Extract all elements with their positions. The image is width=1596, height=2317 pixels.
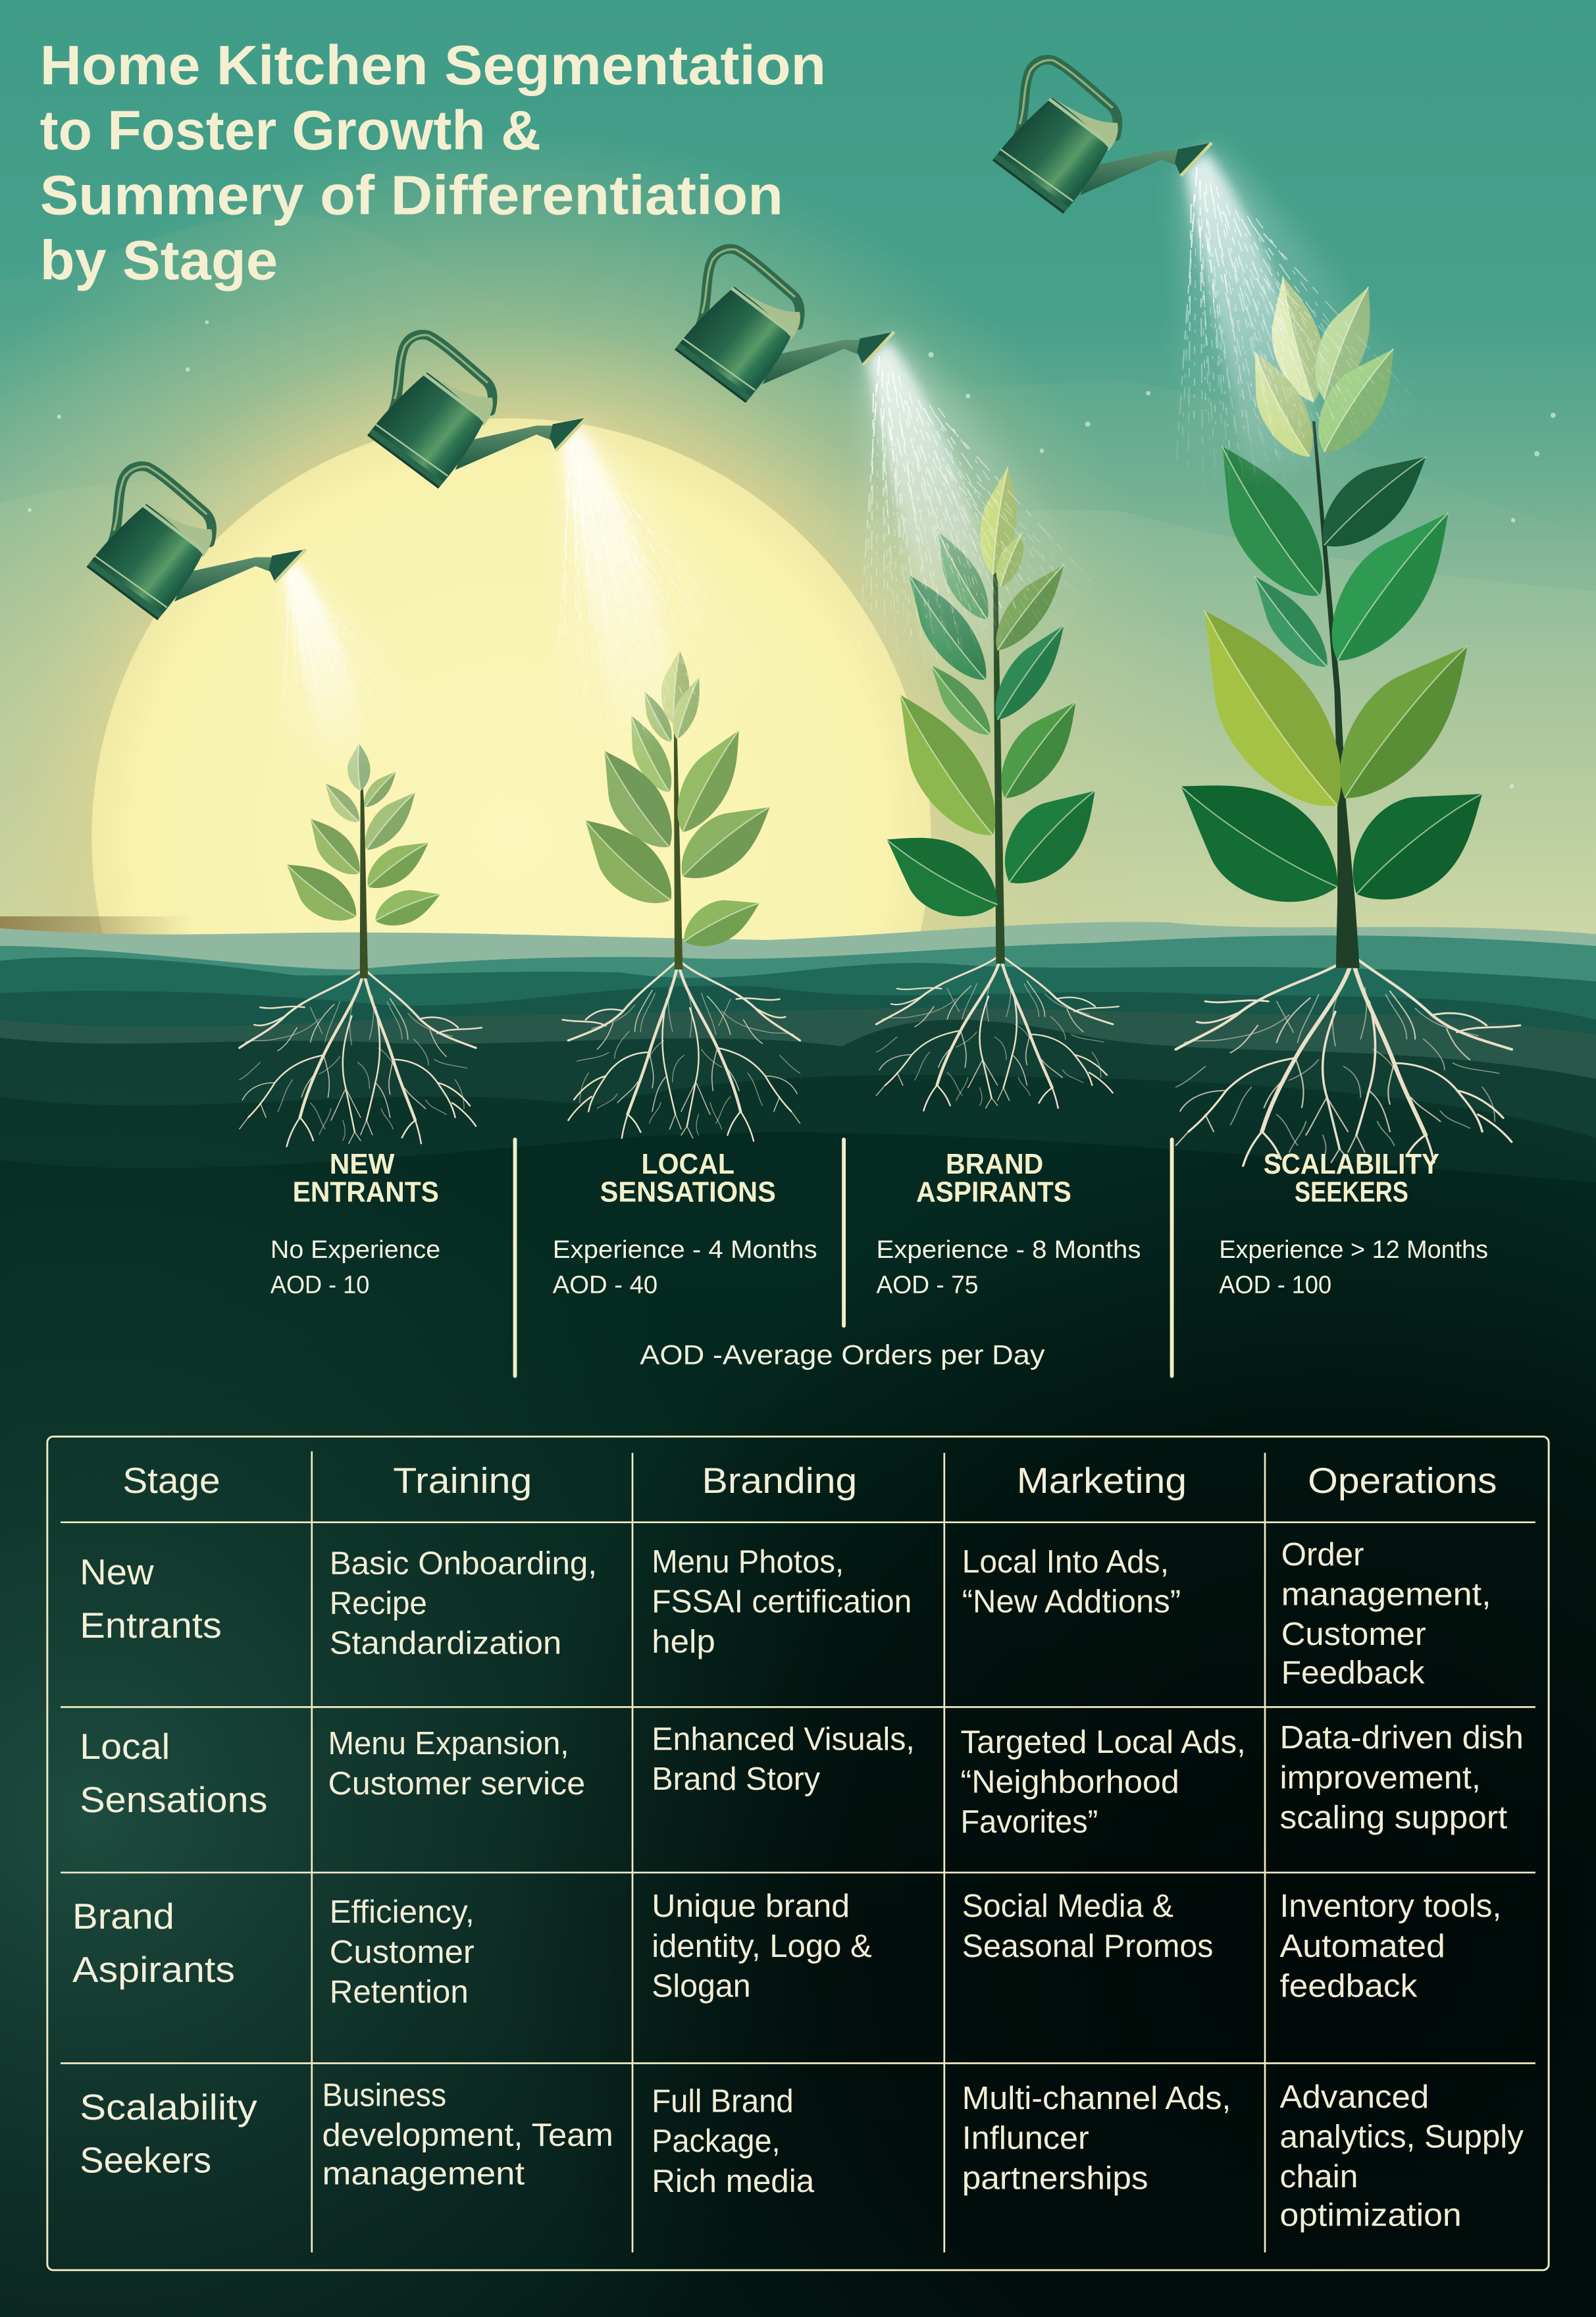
row: brand aspirants: feedback — [1279, 1967, 1418, 2004]
row: brand aspirants: Social Media & — [962, 1888, 1173, 1924]
table header row — [122, 1460, 1497, 1501]
stage: new entrants: NEW — [330, 1148, 395, 1180]
row: scalability seekers: Advanced — [1279, 2079, 1429, 2115]
row: local sensations: Favorites” — [960, 1804, 1098, 1840]
table: differentiation by stage — [47, 1436, 1549, 2270]
stage: brand aspirants: Experience - 8 Months — [877, 1236, 1141, 1264]
watering can 1 with spray — [87, 466, 442, 787]
row: new entrants — [80, 1536, 1491, 1690]
stage: brand aspirants — [877, 1148, 1141, 1299]
stage: local sensations — [553, 1148, 817, 1299]
row: brand aspirants: Inventory tools, — [1279, 1888, 1501, 1924]
row: scalability seekers: partnerships — [962, 2160, 1148, 2196]
stage: scalability seekers — [1219, 1148, 1488, 1299]
stage: scalability seekers: Experience > 12 Months — [1219, 1236, 1488, 1264]
row: new entrants: Basic Onboarding, — [330, 1545, 597, 1581]
row: brand aspirants: Brand — [72, 1896, 174, 1937]
row: local sensations: Targeted Local Ads, — [960, 1724, 1246, 1760]
stage: new entrants: ENTRANTS — [293, 1176, 439, 1208]
plant 3: brand aspirants — [868, 465, 1119, 1110]
row: scalability seekers: Scalability — [80, 2087, 257, 2127]
stage: new entrants: No Experience — [270, 1236, 440, 1264]
row: scalability seekers: Multi-channel Ads, — [962, 2080, 1231, 2116]
table header row: Operations — [1308, 1460, 1497, 1501]
stage: scalability seekers: SCALABILITY — [1264, 1148, 1439, 1180]
row: new entrants: Customer — [1281, 1616, 1426, 1652]
stage: brand aspirants: BRAND — [946, 1148, 1043, 1180]
stage: brand aspirants: ASPIRANTS — [916, 1176, 1071, 1208]
row: new entrants: Feedback — [1281, 1654, 1425, 1690]
row: brand aspirants: Customer — [330, 1934, 475, 1970]
watering can 2 with spray — [368, 334, 790, 789]
row: local sensations: “Neighborhood — [960, 1764, 1179, 1800]
row: scalability seekers: development, Team — [322, 2117, 613, 2153]
row: local sensations: Enhanced Visuals, — [652, 1721, 915, 1757]
table header row: Branding — [702, 1460, 857, 1501]
row: brand aspirants: Retention — [330, 1973, 469, 2010]
row: brand aspirants: Automated — [1279, 1928, 1445, 1964]
row: brand aspirants: Slogan — [652, 1967, 751, 2004]
row: new entrants: “New Addtions” — [962, 1584, 1181, 1620]
row: brand aspirants: Seasonal Promos — [962, 1928, 1213, 1964]
row: local sensations: scaling support — [1279, 1799, 1508, 1835]
row: brand aspirants: Aspirants — [72, 1949, 235, 1990]
row: brand aspirants: Efficiency, — [330, 1894, 475, 1930]
row: scalability seekers: Package, — [652, 2123, 781, 2159]
row: brand aspirants: identity, Logo & — [652, 1928, 872, 1964]
row: new entrants: Entrants — [80, 1605, 222, 1646]
row: new entrants: Standardization — [330, 1625, 561, 1661]
table header row: Training — [393, 1460, 532, 1501]
row: local sensations: Sensations — [80, 1779, 267, 1820]
row: brand aspirants: Unique brand — [652, 1888, 850, 1924]
row: local sensations: Brand Story — [652, 1761, 820, 1797]
row: brand aspirants — [72, 1888, 1501, 2010]
row: scalability seekers: Influncer — [962, 2120, 1089, 2156]
watering can 3 with spray — [675, 249, 1121, 704]
stage: local sensations: LOCAL — [641, 1148, 734, 1180]
row: local sensations: Local — [80, 1726, 170, 1767]
row: new entrants: help — [652, 1623, 715, 1659]
hills and layered soil — [0, 922, 1596, 1271]
stage: new entrants — [270, 1148, 440, 1299]
water droplets in the sky — [28, 321, 1556, 789]
row: scalability seekers: Seekers — [80, 2140, 211, 2181]
row: scalability seekers: Business — [322, 2077, 446, 2114]
AOD footnote: AOD -Average Orders per Day — [640, 1339, 1045, 1370]
row: scalability seekers: Full Brand — [652, 2083, 794, 2120]
stage: new entrants: AOD - 10 — [270, 1271, 369, 1299]
title: Summery of Differentiation — [40, 165, 783, 226]
stage: local sensations: Experience - 4 Months — [553, 1236, 817, 1264]
row: scalability seekers: analytics, Supply — [1279, 2118, 1524, 2154]
title: Home Kitchen Segmentation — [40, 34, 826, 96]
stage: scalability seekers: AOD - 100 — [1219, 1271, 1331, 1299]
row: new entrants: Recipe — [330, 1585, 427, 1621]
lower page shading — [0, 1035, 1596, 2317]
stage: local sensations: SENSATIONS — [600, 1176, 776, 1208]
title — [40, 34, 826, 291]
stage: brand aspirants: AOD - 75 — [877, 1271, 978, 1299]
row: local sensations: Data-driven dish — [1279, 1719, 1524, 1756]
row: local sensations: Customer service — [328, 1765, 585, 1802]
stage dividers — [515, 1139, 1172, 1376]
row: local sensations — [80, 1719, 1524, 1840]
row: scalability seekers: management — [322, 2156, 525, 2192]
stage: scalability seekers: SEEKERS — [1295, 1176, 1408, 1208]
row: scalability seekers: chain — [1279, 2158, 1358, 2195]
row: new entrants: Menu Photos, — [652, 1544, 844, 1580]
row: local sensations: Menu Expansion, — [328, 1725, 569, 1761]
watering can 4 with spray — [993, 60, 1439, 514]
row: scalability seekers: Rich media — [652, 2163, 815, 2199]
row: local sensations: improvement, — [1279, 1759, 1481, 1796]
stage: local sensations: AOD - 40 — [553, 1271, 657, 1299]
table header row: Stage — [122, 1460, 220, 1501]
row: scalability seekers: optimization — [1279, 2197, 1462, 2233]
row: new entrants: Local Into Ads, — [962, 1544, 1169, 1580]
row: new entrants: management, — [1281, 1576, 1491, 1612]
row: new entrants: New — [80, 1551, 154, 1592]
plant 4: scalability seekers — [1152, 271, 1520, 1166]
table header row: Marketing — [1017, 1460, 1187, 1501]
row: new entrants: Order — [1281, 1536, 1364, 1573]
plant 1: new entrants — [240, 743, 482, 1147]
plant 2: local sensations — [563, 649, 800, 1141]
row: new entrants: FSSAI certification — [652, 1584, 912, 1620]
title: by Stage — [40, 229, 278, 291]
title: to Foster Growth & — [40, 99, 541, 161]
row: scalability seekers — [80, 2077, 1524, 2233]
